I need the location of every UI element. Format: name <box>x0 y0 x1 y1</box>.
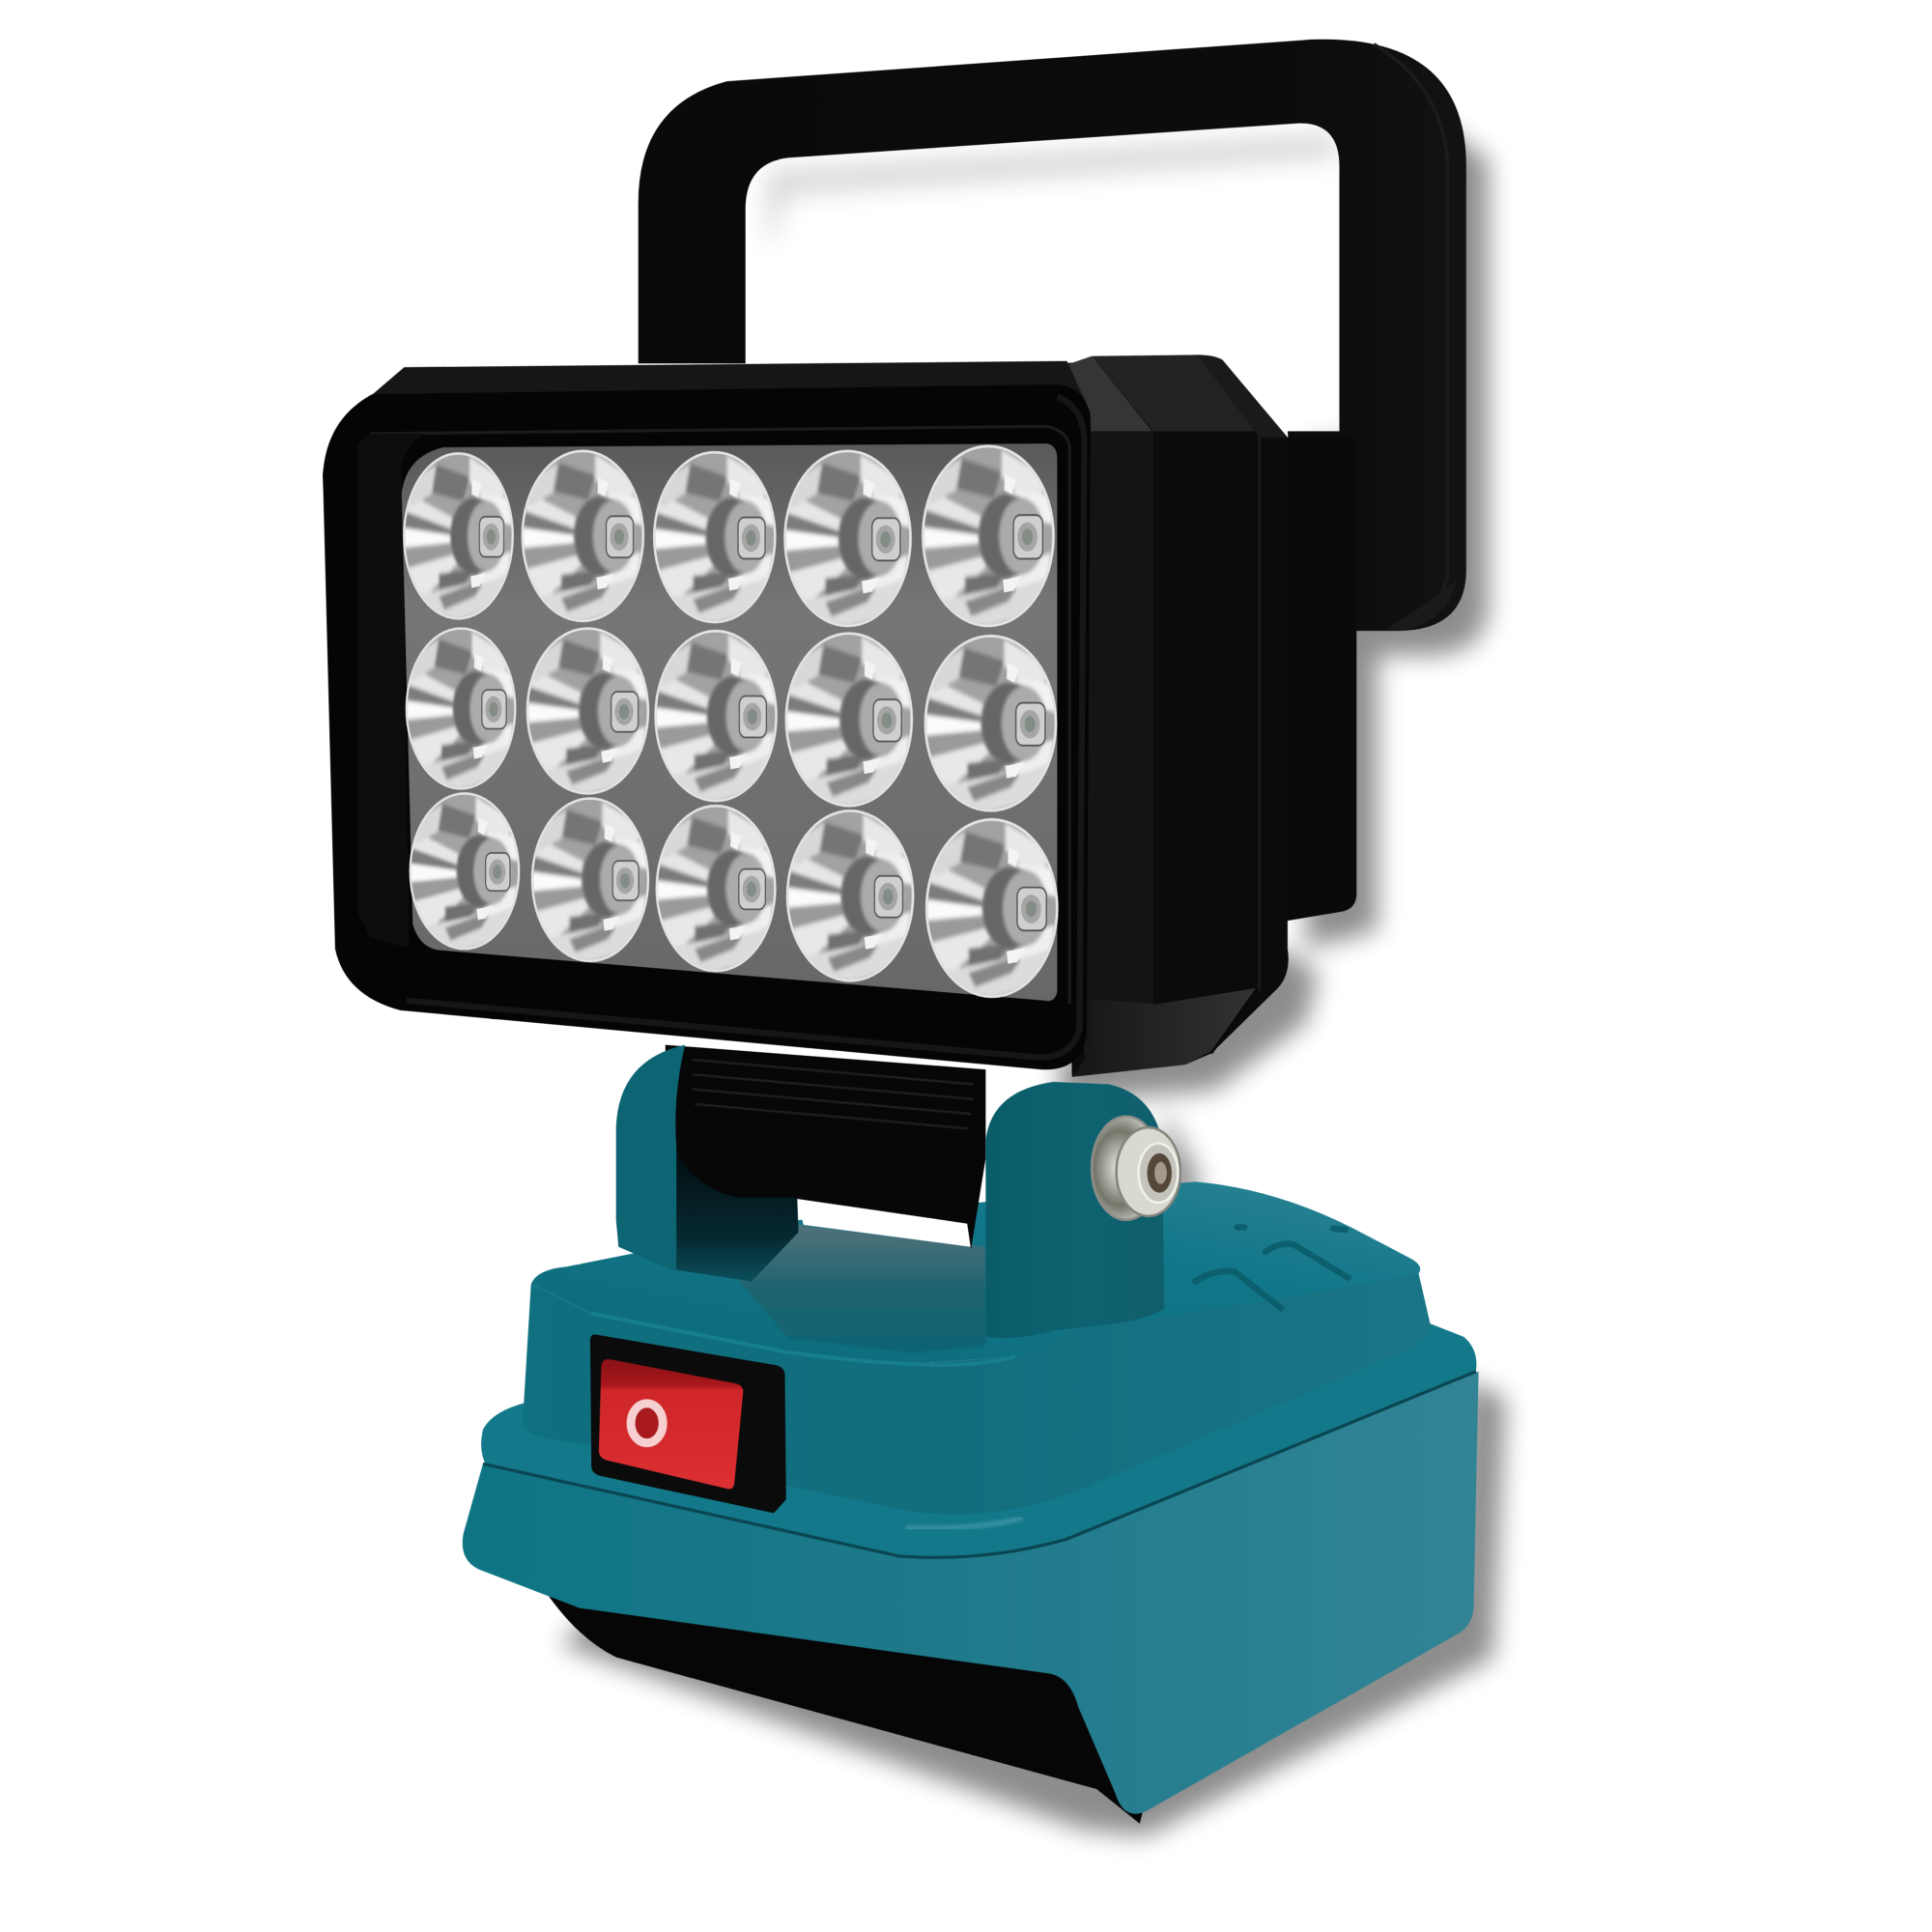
lens row 2 <box>406 627 1057 812</box>
drop shadows <box>560 74 1506 1836</box>
red rocker <box>599 1359 743 1489</box>
handle highlight ridge <box>1374 44 1448 629</box>
lens row 3 <box>409 792 1059 998</box>
black underside <box>549 1596 1152 1824</box>
mounting block <box>1269 438 1356 922</box>
top chamfer <box>1067 356 1153 433</box>
top surface <box>531 1181 1420 1364</box>
lamp head front <box>323 361 1091 1069</box>
lens row 1 <box>403 444 1055 627</box>
switch bezel <box>590 1334 786 1513</box>
white gap under hinge <box>797 1199 971 1247</box>
recessed floor under hinge <box>739 1225 985 1353</box>
rocker switch <box>590 1334 786 1513</box>
left pivot bracket <box>616 1045 799 1282</box>
lamp rear housing <box>1060 355 1356 1077</box>
top bezel edge <box>370 426 1069 1005</box>
illustration: cordless LED work light <box>323 39 1521 1851</box>
inner shaded side <box>671 1140 799 1282</box>
bottom chamfer <box>1072 988 1256 1077</box>
top face <box>1092 355 1260 431</box>
battery adapter lower body <box>463 1319 1479 1824</box>
LED lens array <box>403 444 1059 998</box>
battery gauge ridges <box>1195 1227 1348 1309</box>
lip band <box>481 1319 1476 1556</box>
metal DC jack <box>1092 1117 1180 1220</box>
outer face <box>616 1045 685 1271</box>
adapter upper housing <box>523 1181 1432 1515</box>
carrying handle <box>639 40 1466 631</box>
lip highlight <box>906 1518 1023 1528</box>
power ring symbol <box>631 1404 663 1443</box>
tilt hinge <box>666 1045 985 1249</box>
rear body <box>1060 355 1289 1077</box>
right pivot bracket <box>985 1082 1164 1338</box>
side bands <box>1091 431 1153 1005</box>
LED panel <box>402 443 1057 1001</box>
